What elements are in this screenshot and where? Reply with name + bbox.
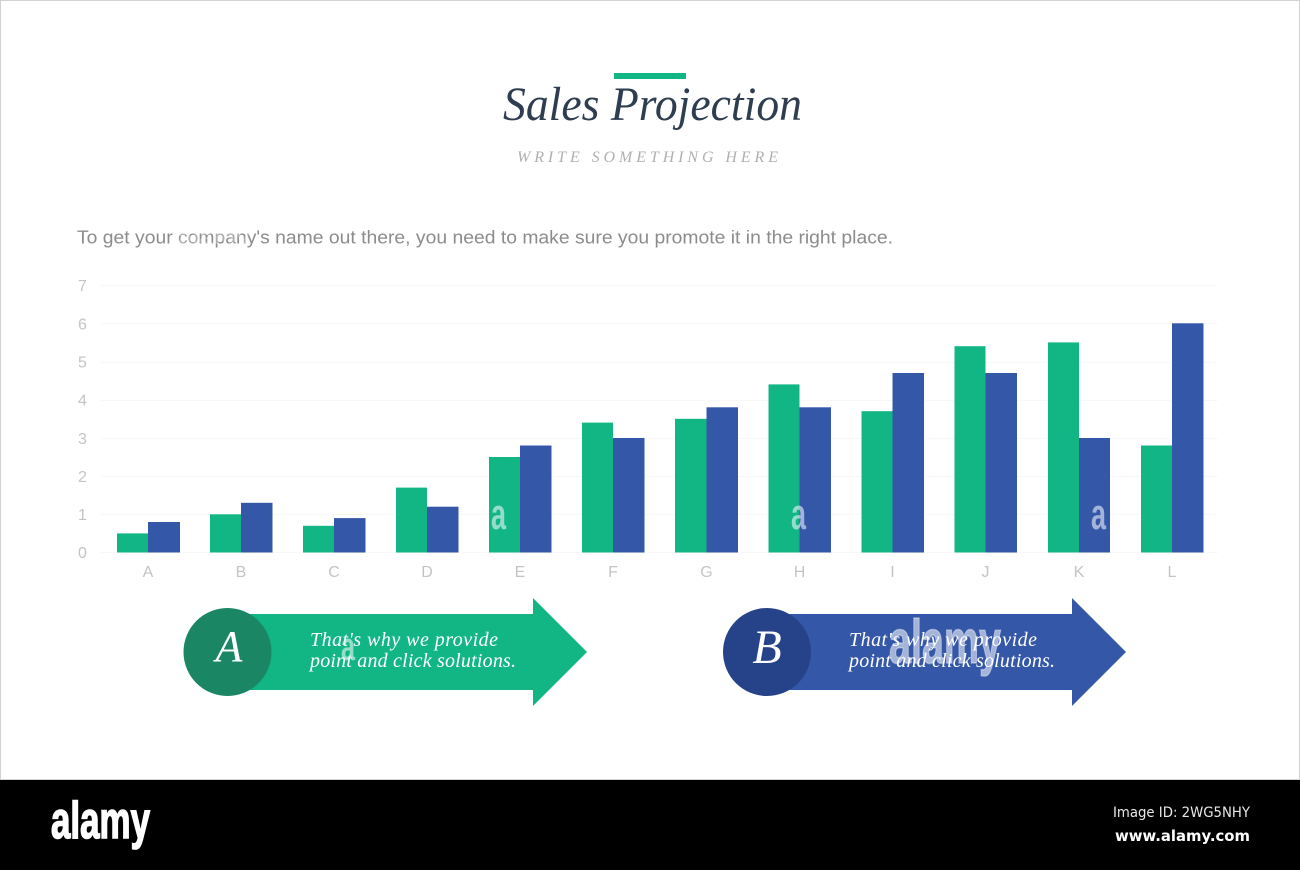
blue series bars [148, 323, 1204, 552]
x axis labels: J [982, 564, 990, 581]
green series bars [117, 342, 1172, 552]
arrow A text: point and click solutions. [308, 650, 516, 672]
x axis labels: C [328, 564, 340, 581]
heading block [503, 73, 802, 166]
x axis labels: K [1074, 564, 1085, 581]
x axis labels: L [1168, 564, 1177, 581]
y axis labels: 3 [78, 431, 87, 448]
badge B letter: B [752, 621, 782, 674]
arrow A text: That's why we provide [310, 629, 498, 651]
arrow B text: That's why we provide [849, 629, 1037, 651]
x axis labels: I [890, 564, 895, 581]
badge B [723, 608, 811, 696]
y axis labels: 7 [78, 278, 87, 295]
footer url: www.alamy.com [1115, 827, 1250, 845]
watermarks: alamy [178, 227, 251, 249]
footer bar [0, 780, 1300, 870]
x axis labels: F [608, 564, 618, 581]
arrow B shape [785, 598, 1126, 706]
watermarks: alamy [889, 608, 1001, 677]
watermarks: a [491, 490, 506, 539]
y axis labels: 5 [78, 354, 87, 372]
watermarks: a [1091, 490, 1106, 539]
arrow callout A [184, 598, 587, 706]
watermarks: a [791, 490, 806, 539]
arrow B text: point and click solutions. [847, 650, 1055, 672]
badge A letter: A [213, 622, 244, 671]
arrow callout B [723, 598, 1126, 706]
y axis labels: 4 [78, 392, 87, 410]
x axis labels: B [236, 564, 246, 581]
title: Sales Projection [503, 78, 802, 131]
subtitle: WRITE SOMETHING HERE [517, 149, 778, 166]
intro text: To get your company's name out there, you need to make sure you promote it in the right place. [77, 228, 893, 248]
x axis labels: D [421, 564, 433, 581]
y axis labels: 1 [78, 507, 87, 524]
badge A [184, 608, 272, 696]
y axis labels: 6 [78, 316, 87, 334]
x axis labels: G [700, 564, 713, 581]
footer logo: alamy [51, 792, 150, 850]
x axis labels: E [515, 564, 525, 581]
watermarks [178, 227, 1106, 677]
y axis labels: 0 [78, 545, 87, 562]
bar chart [78, 278, 1218, 581]
arrow A shape [245, 598, 587, 706]
watermarks: a [341, 625, 355, 669]
x axis labels [143, 564, 1177, 581]
y axis labels: 2 [78, 469, 87, 486]
image id: Image ID: 2WG5NHY [1113, 805, 1250, 821]
x axis labels: A [143, 564, 154, 581]
y axis labels [78, 278, 87, 562]
x axis labels: H [794, 564, 805, 581]
